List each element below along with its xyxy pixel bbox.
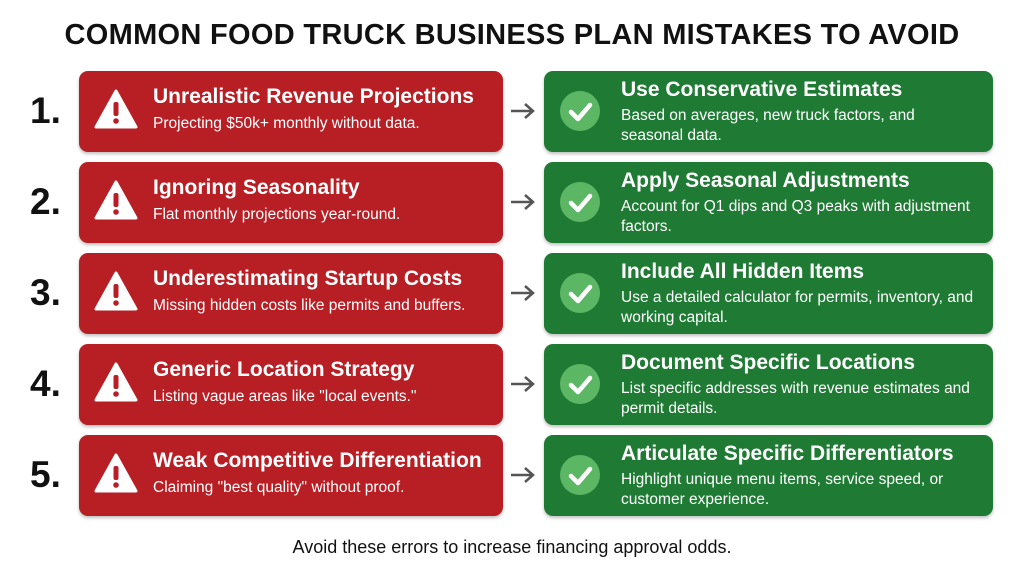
row 3 solution: Use a detailed calculator for permits, inventory, and working capital.: [621, 289, 973, 326]
icon: warning: [94, 453, 138, 492]
row 2 solution: [544, 162, 993, 243]
row 4 solution: List specific addresses with revenue estimates and permit details.: [621, 380, 970, 417]
row 1 mistake: Unrealistic Revenue Projections: [153, 85, 474, 108]
row 5 mistake: Claiming "best quality" without proof.: [153, 479, 404, 496]
row 3 solution: [544, 253, 993, 334]
row 1 mistake: Projecting $50k+ monthly without data.: [153, 115, 420, 132]
row 5 solution: Highlight unique menu items, service speed, or customer experience.: [621, 471, 943, 508]
arrow 4: [511, 376, 535, 392]
icon: check: [560, 455, 600, 495]
row 2 mistake: Ignoring Seasonality: [153, 176, 360, 199]
row 1 number: 1.: [30, 90, 61, 131]
row 4 number: 4.: [30, 363, 61, 404]
row 5 number: 5.: [30, 454, 61, 495]
icon: warning: [94, 180, 138, 220]
row 3 solution: Include All Hidden Items: [621, 260, 864, 283]
icon: check: [560, 182, 600, 222]
row 5 mistake: [79, 435, 503, 516]
row 1 solution: Based on averages, new truck factors, and seasonal data.: [621, 107, 915, 144]
icon: check: [560, 364, 600, 404]
arrow 2: [511, 194, 535, 210]
row 2 mistake: [79, 162, 503, 243]
icon: check: [560, 91, 600, 131]
row 3 mistake: Underestimating Startup Costs: [153, 267, 462, 290]
row 1 solution: Use Conservative Estimates: [621, 78, 902, 101]
icon: warning: [94, 362, 138, 402]
row 5 solution: [544, 435, 993, 516]
arrow 5: [511, 467, 535, 483]
icon: warning: [94, 271, 138, 310]
title: COMMON FOOD TRUCK BUSINESS PLAN MISTAKES TO AVOID: [65, 19, 959, 51]
footer: Avoid these errors to increase financing approval odds.: [293, 537, 731, 557]
arrow 3: [511, 285, 535, 301]
row 4 mistake: Listing vague areas like "local events.": [153, 388, 416, 405]
row 4 mistake: Generic Location Strategy: [153, 358, 414, 381]
row 1 mistake: [79, 71, 503, 152]
row 2 solution: Apply Seasonal Adjustments: [621, 169, 910, 192]
row 4 solution: [544, 344, 993, 425]
row 4 mistake: [79, 344, 503, 425]
row 1 solution: [544, 71, 993, 152]
row 5 mistake: Weak Competitive Differentiation: [153, 449, 482, 472]
row 2 number: 2.: [30, 181, 61, 222]
row 4 solution: Document Specific Locations: [621, 351, 915, 374]
row 2 mistake: Flat monthly projections year-round.: [153, 206, 400, 223]
row 3 mistake: Missing hidden costs like permits and buffers.: [153, 297, 465, 314]
icon: warning: [94, 89, 138, 128]
row 3 mistake: [79, 253, 503, 334]
row 5 solution: Articulate Specific Differentiators: [621, 442, 954, 465]
row 3 number: 3.: [30, 272, 61, 313]
arrow 1: [511, 103, 535, 119]
icon: check: [560, 273, 600, 313]
row 2 solution: Account for Q1 dips and Q3 peaks with adjustment factors.: [621, 198, 970, 235]
